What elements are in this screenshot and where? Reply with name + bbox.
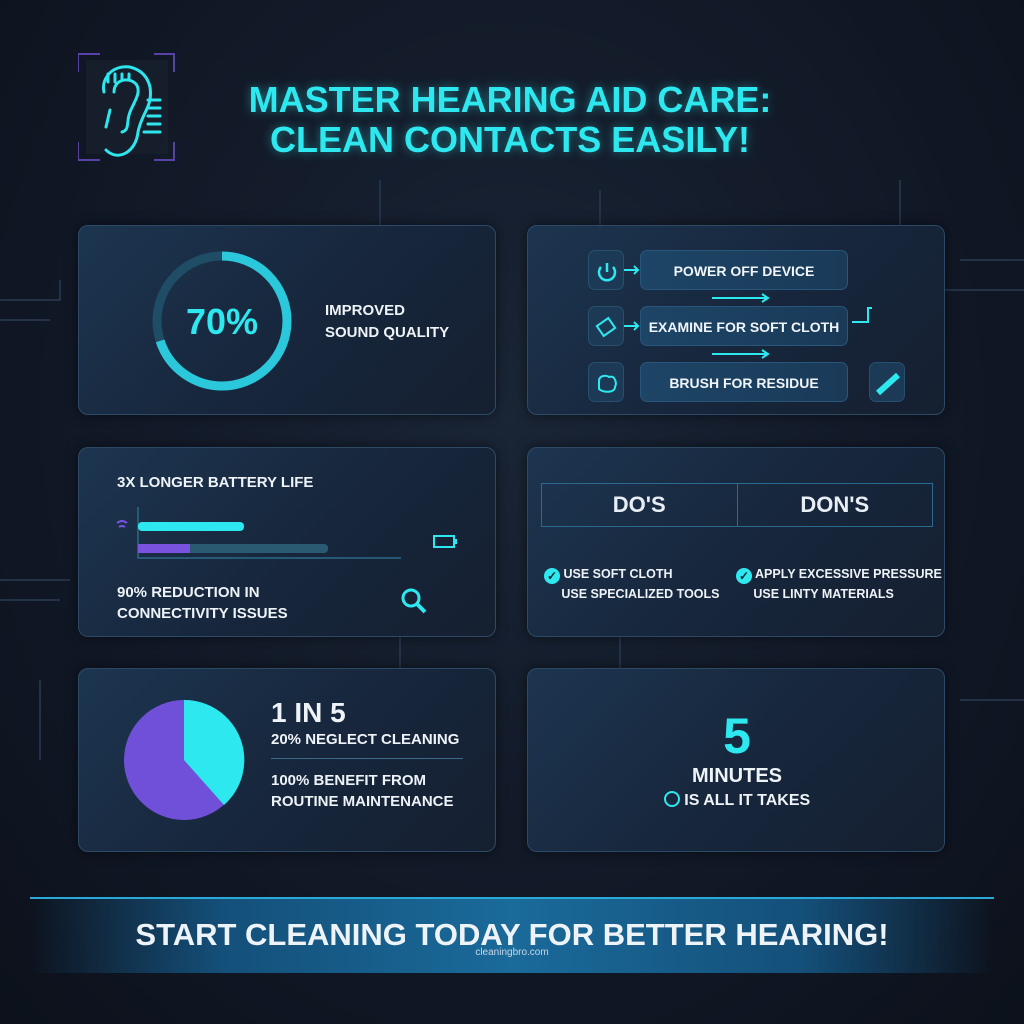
text: improved sound quality: SOUND QUALITY <box>325 324 449 341</box>
panel: steps <box>527 225 945 415</box>
panel: neglect stats <box>78 668 496 852</box>
list: do's: ✓ <box>547 569 557 583</box>
step 3 icon <box>588 362 624 402</box>
text: improved sound quality: IMPROVED <box>325 302 405 319</box>
panel: 5 minutes: IS ALL IT TAKES <box>684 792 810 809</box>
step 1 <box>640 250 848 290</box>
list: don'ts: USE LINTY MATERIALS <box>753 587 894 601</box>
text: connectivity: 90% REDUCTION IN <box>117 584 260 601</box>
table header: DO'S <box>613 492 666 517</box>
panel: battery & connectivity <box>78 447 496 637</box>
list: do's <box>544 567 720 601</box>
arrows <box>624 265 872 359</box>
title <box>245 79 771 160</box>
title: MASTER HEARING AID CARE: <box>249 79 771 120</box>
icon: magnifier <box>402 588 426 614</box>
footer banner: cleaningbro.com <box>475 947 549 958</box>
step 3: BRUSH FOR RESIDUE <box>669 375 819 391</box>
heading: battery: 3X LONGER BATTERY LIFE <box>117 474 313 491</box>
text: connectivity: CONNECTIVITY ISSUES <box>117 605 288 622</box>
list: don'ts: ✓ <box>739 569 749 583</box>
text: connectivity <box>117 584 288 622</box>
step 2 icon <box>588 306 624 346</box>
ring chart 70%: 70% <box>186 301 258 342</box>
step 2: EXAMINE FOR SOFT CLOTH <box>649 319 839 335</box>
step 3 <box>640 362 848 402</box>
bar chart <box>116 507 457 559</box>
footer banner <box>30 897 994 973</box>
panel: 5 minutes: 5 <box>723 708 751 764</box>
panel: neglect stats: ROUTINE MAINTENANCE <box>271 793 454 810</box>
panel: neglect stats: 100% BENEFIT FROM <box>271 772 426 789</box>
panel: neglect stats: 20% NEGLECT CLEANING <box>271 731 459 748</box>
panel: 5 minutes: MINUTES <box>692 765 782 787</box>
step 2 <box>640 306 848 346</box>
footer banner: START CLEANING TODAY FOR BETTER HEARING! <box>135 917 889 952</box>
table header: DON'S <box>800 492 869 517</box>
list: do's: USE SOFT CLOTH <box>563 567 672 581</box>
title: CLEAN CONTACTS EASILY! <box>270 119 750 160</box>
panel: 5 minutes <box>527 668 945 852</box>
list: don'ts <box>736 567 942 601</box>
ring chart 70% <box>152 252 292 390</box>
panel: do's and don'ts <box>527 447 945 637</box>
text: improved sound quality <box>325 302 449 341</box>
list: don'ts: APPLY EXCESSIVE PRESSURE <box>755 567 942 581</box>
panel: sound quality <box>78 225 496 415</box>
pie chart <box>124 700 244 820</box>
step 1 icon <box>588 250 624 290</box>
icon: brush <box>869 362 905 402</box>
icon: battery <box>434 536 457 547</box>
icon: ear <box>78 53 175 161</box>
list: do's: USE SPECIALIZED TOOLS <box>561 587 720 601</box>
table header <box>541 483 933 527</box>
step 1: POWER OFF DEVICE <box>674 263 814 279</box>
text: 1 in 5: 1 IN 5 <box>271 697 346 728</box>
